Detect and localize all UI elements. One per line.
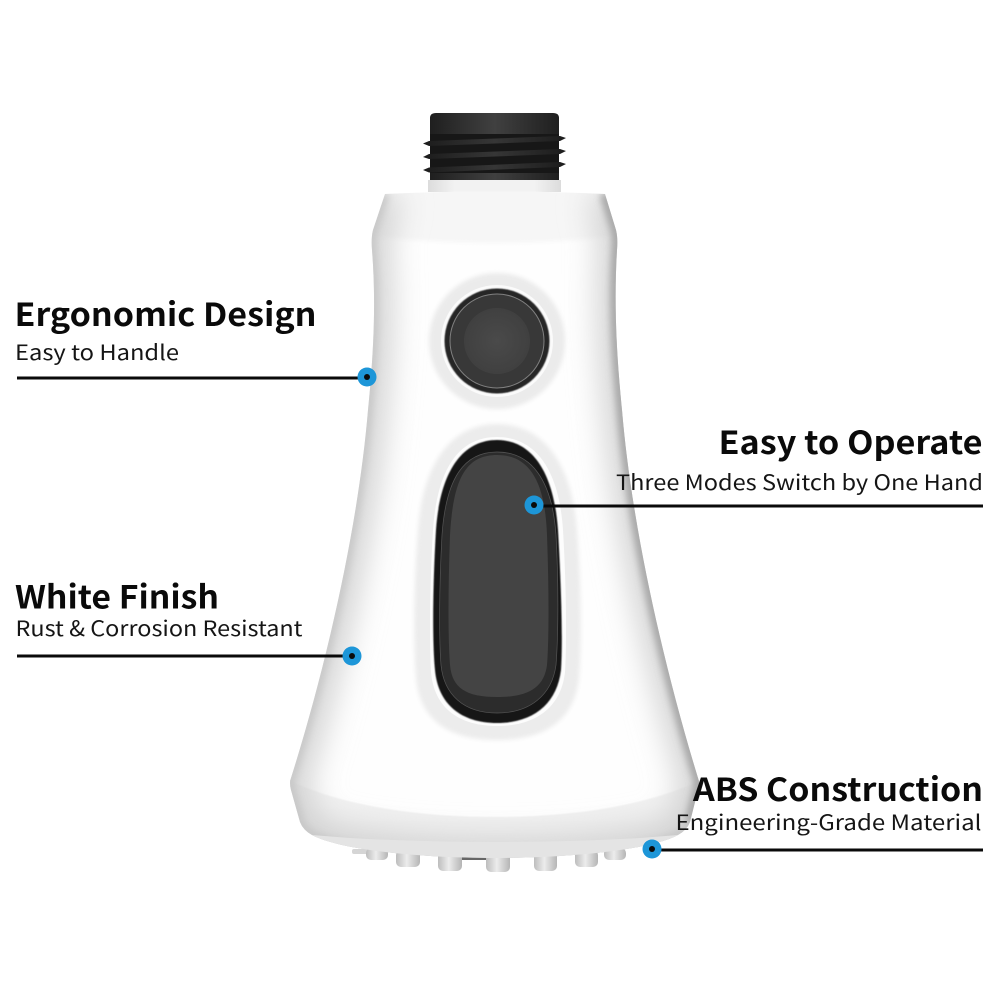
- callout: ABS Construction: [642, 765, 983, 858]
- body shell: [290, 192, 699, 858]
- body base lip over nozzles: [312, 835, 678, 858]
- marker dot: [342, 646, 362, 666]
- threaded black connector: [423, 113, 566, 180]
- callout: Easy to Operate: [524, 418, 983, 514]
- heading: White Finish: White Finish: [15, 572, 219, 618]
- spray nozzles: [352, 848, 626, 872]
- heading: Easy to Operate: Easy to Operate: [718, 418, 982, 464]
- heading: ABS Construction: ABS Construction: [692, 765, 983, 811]
- subtext: Easy to Handle: Easy to Handle: [15, 337, 179, 367]
- callout: Ergonomic Design: [14, 290, 376, 386]
- marker dot: [642, 840, 662, 858]
- callout: White Finish: [15, 572, 362, 666]
- oval recess halo: [414, 424, 581, 740]
- leader line: [17, 654, 347, 658]
- marker dot: [524, 496, 544, 514]
- subtext: Rust & Corrosion Resistant: Rust & Corrosion Resistant: [16, 613, 303, 643]
- leader line: [17, 376, 362, 380]
- white collar: [428, 180, 561, 192]
- oval switch panel: [433, 440, 562, 723]
- subtext: Engineering-Grade Material: Engineering-Grade Material: [676, 807, 982, 837]
- product: spray head: [270, 113, 720, 872]
- marker dot: [358, 368, 376, 386]
- leader line: [540, 504, 983, 508]
- leader line: [657, 848, 983, 852]
- button recess halo: [429, 273, 565, 409]
- subtext: Three Modes Switch by One Hand: Three Modes Switch by One Hand: [616, 467, 983, 497]
- heading: Ergonomic Design: Ergonomic Design: [14, 290, 316, 336]
- round button: [444, 288, 550, 394]
